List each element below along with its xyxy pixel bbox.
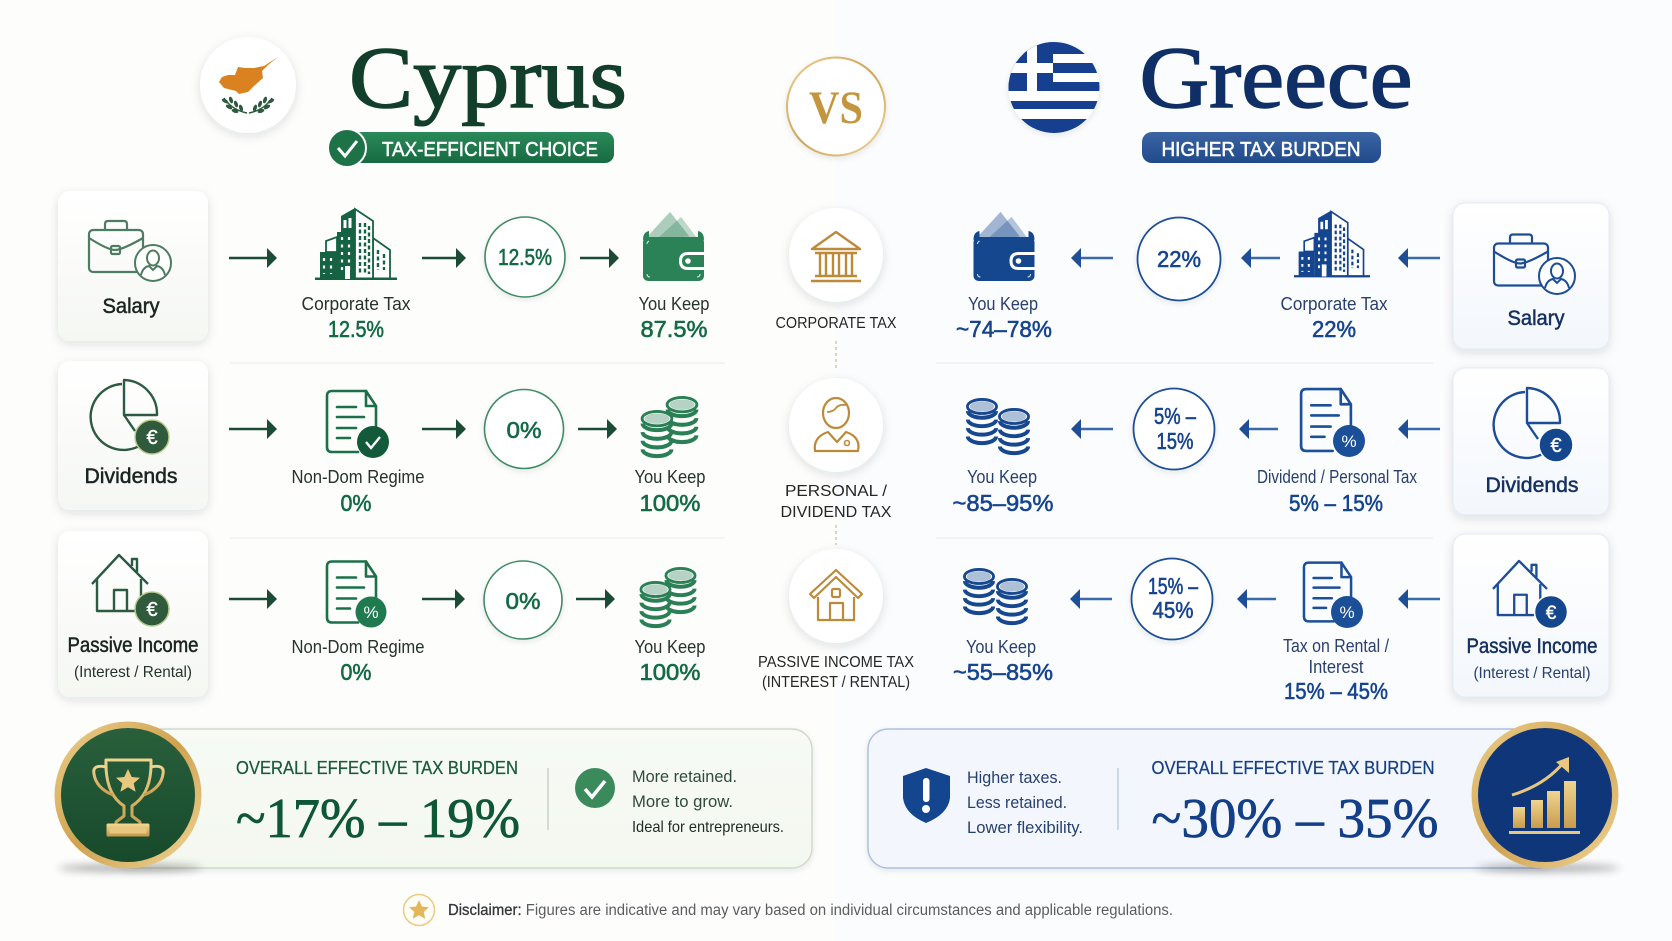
icon: corporate building xyxy=(315,208,397,280)
header: Greece xyxy=(1005,30,1412,163)
label: (INTEREST / RENTAL) xyxy=(762,674,910,691)
row: Cyprus salary xyxy=(58,191,710,342)
text: drawbacks xyxy=(967,768,1083,837)
text: you keep xyxy=(956,294,1052,342)
text: tax on rental / interest xyxy=(1283,636,1389,704)
arrow xyxy=(1398,589,1440,609)
arrow xyxy=(229,419,277,439)
rate circle: 0% xyxy=(506,417,542,443)
text: you keep: You Keep xyxy=(967,467,1037,487)
text: non-dom regime: Non-Dom Regime xyxy=(292,637,424,657)
text: you keep xyxy=(952,467,1054,516)
icon: document with percent: % xyxy=(363,603,379,622)
rate circle: 45% xyxy=(1152,597,1194,623)
text: corporate tax: Corporate Tax xyxy=(302,294,410,314)
card: dividends: Dividends xyxy=(84,465,178,488)
icon: coins xyxy=(964,569,1027,623)
medal: trophy xyxy=(54,722,202,868)
text: non-dom regime xyxy=(292,637,424,685)
medal: growth chart xyxy=(1472,722,1618,868)
value: ~30% – 35% xyxy=(1152,788,1438,850)
arrow xyxy=(580,248,619,268)
rate circle: 0% xyxy=(506,588,540,614)
text: corporate tax: Corporate Tax xyxy=(1280,294,1388,314)
arrow xyxy=(1071,419,1113,439)
arrow xyxy=(578,419,617,439)
icon: Cyprus flag badge xyxy=(200,37,296,133)
rate circle xyxy=(484,390,564,468)
text: corporate tax xyxy=(1280,294,1388,342)
text: benefits: Ideal for entrepreneurs. xyxy=(632,819,784,836)
text: corporate tax xyxy=(302,294,410,342)
label: OVERALL EFFECTIVE TAX BURDEN xyxy=(1152,758,1434,778)
row: Greece passive income xyxy=(953,534,1609,704)
icon: Greek flag xyxy=(1005,40,1103,136)
icon: star xyxy=(404,894,434,926)
text: tax on rental / interest: 15% – 45% xyxy=(1284,678,1388,704)
text: you keep xyxy=(634,637,706,685)
rate circle xyxy=(1138,218,1220,300)
label: CORPORATE TAX xyxy=(776,315,897,332)
rate circle xyxy=(1132,558,1212,640)
badge: tax-efficient choice: TAX-EFFICIENT CHOICE xyxy=(382,139,598,161)
text: dividend / personal tax: 5% – 15% xyxy=(1289,490,1383,516)
text: benefits xyxy=(632,767,784,836)
rate circle xyxy=(484,561,562,639)
arrow xyxy=(229,589,277,609)
badge: higher tax burden: HIGHER TAX BURDEN xyxy=(1162,139,1360,161)
arrow xyxy=(1237,589,1276,609)
text: tax on rental / interest: Interest xyxy=(1308,657,1364,677)
label: PERSONAL / xyxy=(785,483,888,500)
rate circle xyxy=(1134,388,1214,470)
card: dividends xyxy=(58,361,208,510)
text: dividend / personal tax: Dividend / Personal Tax xyxy=(1257,467,1417,487)
card: salary: Salary xyxy=(102,295,160,318)
card: passive income: € xyxy=(146,599,158,621)
arrow xyxy=(422,589,465,609)
card: passive income: € xyxy=(1546,603,1557,624)
text: you keep: 100% xyxy=(640,659,700,685)
arrow xyxy=(229,248,277,268)
title: Cyprus: Cyprus xyxy=(349,30,627,127)
disclaimer xyxy=(404,894,1173,926)
text: you keep xyxy=(634,467,706,516)
row: Cyprus dividends xyxy=(58,361,706,516)
text: non-dom regime: 0% xyxy=(340,659,372,685)
text: benefits: More retained. xyxy=(632,767,737,786)
arrow xyxy=(1241,248,1280,268)
icon: corporate tax xyxy=(789,208,883,302)
arrow xyxy=(1398,419,1440,439)
text: you keep: ~85–95% xyxy=(952,490,1054,516)
icon: warning shield xyxy=(903,768,950,823)
icon: document with percent: % xyxy=(1339,603,1355,622)
VS emblem: VS xyxy=(809,82,863,134)
card: passive income: (Interest / Rental) xyxy=(74,664,192,681)
rate circle: 5% – xyxy=(1154,403,1196,429)
text: corporate tax: 12.5% xyxy=(328,316,384,342)
card: dividends: € xyxy=(1550,435,1562,457)
icon: corporate building xyxy=(1294,211,1370,277)
text: you keep: ~55–85% xyxy=(953,659,1053,685)
text: tax on rental / interest: Tax on Rental / xyxy=(1283,636,1389,656)
card: dividends: € xyxy=(146,427,158,449)
label: DIVIDEND TAX xyxy=(780,504,892,521)
icon: personal tax xyxy=(789,378,883,472)
column: tax categories xyxy=(758,208,915,691)
title: Greece: Greece xyxy=(1140,30,1412,127)
arrow xyxy=(1239,419,1278,439)
row: Cyprus passive income xyxy=(58,531,706,697)
label xyxy=(780,483,892,521)
text: you keep: You Keep xyxy=(634,637,706,657)
rate circle xyxy=(485,217,565,297)
row: Greece salary xyxy=(956,203,1609,349)
arrow xyxy=(1071,248,1113,268)
rate circle: 15% xyxy=(1156,428,1194,454)
text: you keep: 87.5% xyxy=(640,316,708,342)
VS emblem xyxy=(787,58,885,156)
card: passive income: Passive Income xyxy=(68,634,198,657)
row: Greece dividends xyxy=(952,368,1609,516)
icon: check xyxy=(575,768,615,808)
text: benefits: More to grow. xyxy=(632,792,733,811)
card: passive income xyxy=(1453,534,1609,697)
icon: wallet xyxy=(974,213,1034,281)
card: passive income xyxy=(58,531,208,697)
card: salary: Salary xyxy=(1508,307,1565,330)
text: corporate tax: 22% xyxy=(1312,316,1356,342)
icon: document with percent xyxy=(1301,389,1365,457)
icon: coins xyxy=(642,397,697,456)
text: drawbacks: Lower flexibility. xyxy=(967,818,1083,837)
rate circle: 15% – xyxy=(1148,573,1198,599)
text: you keep: You Keep xyxy=(638,294,710,314)
card: dividends: Dividends xyxy=(1486,474,1578,497)
badge: higher tax burden xyxy=(1142,132,1381,163)
panel: Cyprus overall burden xyxy=(54,722,812,872)
icon: passive income tax xyxy=(789,549,883,643)
text: you keep xyxy=(953,637,1053,685)
text: non-dom regime: 0% xyxy=(340,490,372,516)
arrow xyxy=(1398,248,1440,268)
arrow xyxy=(422,248,466,268)
card: dividends xyxy=(1453,368,1609,515)
arrow xyxy=(576,589,615,609)
icon: document with percent xyxy=(1304,563,1363,628)
icon: coins xyxy=(641,568,695,626)
disclaimer: Disclaimer: Figures are indicative and may vary based on individual circumstances and applicable regulations. xyxy=(448,902,1173,919)
text: dividend / personal tax xyxy=(1257,467,1417,516)
text: you keep xyxy=(638,294,710,342)
header: Cyprus xyxy=(200,30,627,167)
badge: tax-efficient choice xyxy=(328,129,614,167)
text: you keep: ~74–78% xyxy=(956,316,1052,342)
icon: document with percent: % xyxy=(1341,432,1357,451)
arrow xyxy=(422,419,466,439)
text: drawbacks: Less retained. xyxy=(967,793,1067,812)
label: OVERALL EFFECTIVE TAX BURDEN xyxy=(236,758,518,778)
icon: coins xyxy=(967,399,1029,453)
text: non-dom regime xyxy=(292,467,424,516)
label: PASSIVE INCOME TAX xyxy=(758,654,915,671)
card: salary xyxy=(1453,203,1609,349)
panel: Greece overall burden xyxy=(868,722,1620,872)
icon: document with percent xyxy=(327,562,386,628)
text: drawbacks: Higher taxes. xyxy=(967,768,1062,787)
text: you keep: 100% xyxy=(640,490,700,516)
card: passive income: Passive Income xyxy=(1466,635,1598,658)
text: you keep: You Keep xyxy=(634,467,706,487)
rate circle: 12.5% xyxy=(498,244,552,270)
card: passive income: (Interest / Rental) xyxy=(1474,665,1590,682)
icon: document with check xyxy=(327,391,389,458)
arrow xyxy=(1070,589,1112,609)
rate circle: 22% xyxy=(1157,246,1201,272)
label xyxy=(758,654,915,691)
text: you keep: You Keep xyxy=(966,637,1036,657)
card: salary xyxy=(58,191,208,341)
text: non-dom regime: Non-Dom Regime xyxy=(292,467,424,487)
value: ~17% – 19% xyxy=(236,788,520,850)
icon: wallet xyxy=(643,213,704,281)
text: you keep: You Keep xyxy=(968,294,1038,314)
